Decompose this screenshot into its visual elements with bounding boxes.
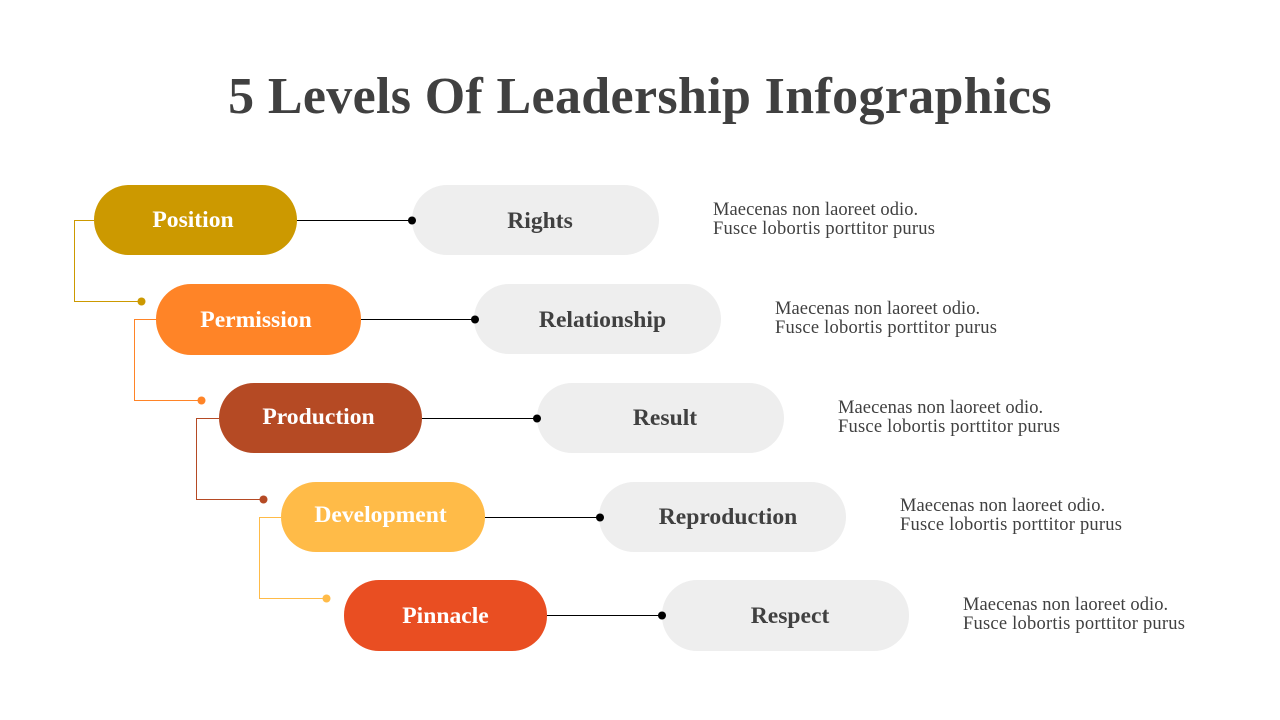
outcome 3: result: Result: [633, 404, 697, 430]
description 3: [838, 398, 1060, 437]
level 1: position: [94, 185, 297, 255]
outcome 4: reproduction: [599, 482, 846, 552]
level 5: pinnacle: [344, 580, 547, 651]
outcome 4: reproduction: Reproduction: [659, 504, 797, 530]
description 1: Maecenas non laoreet odio.: [713, 200, 918, 220]
level 4: development: Development: [314, 502, 447, 528]
outcome 2: relationship: Relationship: [539, 306, 666, 332]
title: 5 Levels Of Leadership Infographics: [228, 68, 1052, 125]
outcome 5: respect: [662, 580, 909, 651]
level 3: production: Production: [262, 404, 375, 430]
level 2: permission: [156, 284, 361, 355]
outcome 3: result: [537, 383, 784, 453]
outcome 1: rights: [412, 185, 659, 255]
description 3: Fusce lobortis porttitor purus: [838, 417, 1060, 437]
level 1: position: Position: [152, 206, 234, 232]
description 4: [900, 496, 1122, 535]
description 1: [713, 200, 935, 239]
level 2: permission: Permission: [200, 307, 312, 333]
description 5: Fusce lobortis porttitor purus: [963, 614, 1185, 634]
description 1: Fusce lobortis porttitor purus: [713, 219, 935, 239]
description 4: Fusce lobortis porttitor purus: [900, 515, 1122, 535]
outcome 1: rights: Rights: [507, 208, 573, 234]
description 5: Maecenas non laoreet odio.: [963, 595, 1168, 615]
description 2: Maecenas non laoreet odio.: [775, 299, 980, 319]
description 2: Fusce lobortis porttitor purus: [775, 318, 997, 338]
description 3: Maecenas non laoreet odio.: [838, 398, 1043, 418]
description 4: Maecenas non laoreet odio.: [900, 496, 1105, 516]
description 2: [775, 299, 997, 338]
level 3: production: [219, 383, 422, 453]
outcome 5: respect: Respect: [751, 603, 829, 629]
description 5: [963, 595, 1185, 634]
outcome 2: relationship: [474, 284, 721, 354]
level 4: development: [281, 482, 485, 552]
level 5: pinnacle: Pinnacle: [402, 603, 489, 629]
